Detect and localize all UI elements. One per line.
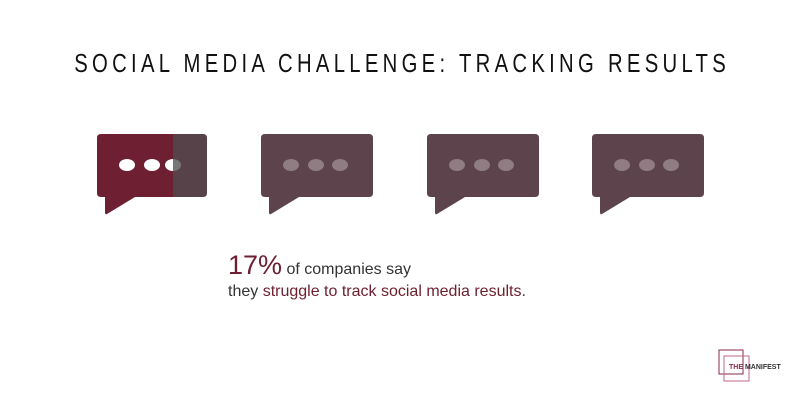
logo: THE MANIFEST	[729, 364, 781, 371]
statistic text: they struggle to track social media results.	[228, 283, 526, 300]
icon: bubble 4	[592, 134, 704, 214]
title: SOCIAL MEDIA CHALLENGE: TRACKING RESULTS	[74, 48, 730, 78]
icon: bubble 3	[427, 134, 539, 214]
statistic text: 17% of companies say	[228, 250, 411, 280]
statistic text	[228, 250, 526, 300]
icon: bubble 2	[261, 134, 373, 214]
icon: bubble highlighted	[97, 134, 207, 214]
logo	[718, 350, 781, 382]
